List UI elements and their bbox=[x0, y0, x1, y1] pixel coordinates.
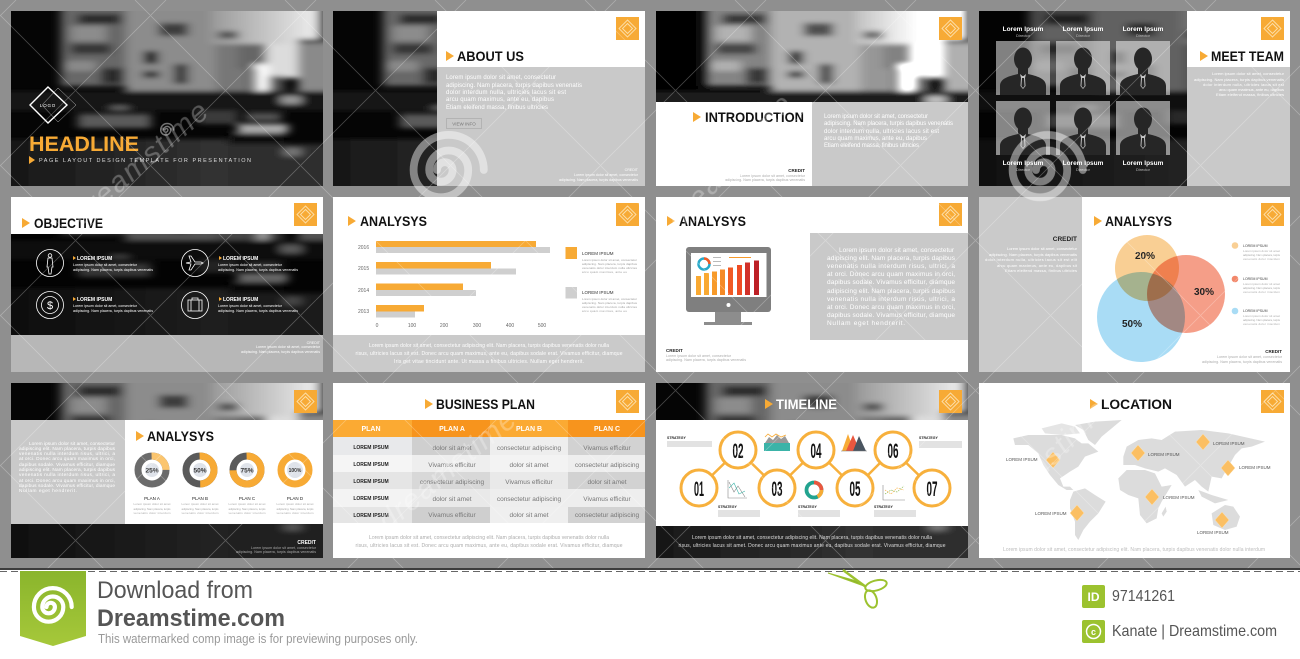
credit: Lorem ipsum dolor sit amet, consectetur bbox=[666, 354, 732, 358]
text block: arcu quam maximus, ante eu, dapibus bbox=[824, 136, 927, 142]
plan labels: Lorem ipsum dolor sit amet bbox=[276, 502, 314, 506]
heading: analysys: ANALYSYS bbox=[147, 428, 214, 444]
footer bbox=[0, 569, 1300, 659]
bar chart: 200 bbox=[440, 323, 448, 329]
text block: adipiscing elit. Nam placera, turpis dapibus bbox=[827, 288, 956, 295]
venn legend: adipiscing. Nam placera, turpis bbox=[1243, 253, 1280, 257]
watermark: dreamstime text bbox=[65, 88, 1113, 537]
venn legend: adipiscing. Nam placera, turpis bbox=[1243, 286, 1280, 290]
plan labels: venenatis dolor interdum bbox=[134, 511, 171, 515]
table: consectetur adipiscing bbox=[575, 512, 640, 519]
credit: Lorem ipsum dolor sit amet, consectetur bbox=[574, 173, 639, 177]
venn legend bbox=[1232, 242, 1280, 326]
bar chart: 2013 bbox=[358, 309, 369, 315]
text block: Nullam eget hendrerit. bbox=[827, 320, 905, 327]
plan labels: venenatis dolor interdum bbox=[182, 511, 219, 515]
download text: This watermarked comp image is for previewing purposes only. bbox=[98, 631, 418, 646]
team roles: Director bbox=[1076, 167, 1091, 172]
credit bbox=[559, 168, 639, 182]
plan labels: Lorem ipsum dolor sit amet bbox=[228, 502, 266, 506]
venn chart: 50% bbox=[1122, 319, 1142, 330]
timeline connectors bbox=[699, 450, 932, 488]
credit right bbox=[1202, 349, 1283, 364]
icon: scissors bbox=[828, 570, 888, 609]
legend: arcu quam maximus, ante eu bbox=[582, 270, 627, 274]
credit bbox=[236, 540, 317, 554]
icon: dollar bbox=[36, 292, 64, 318]
icon: computer monitor with chart bbox=[686, 247, 771, 325]
credit: adipiscing. Nam placera, turpis dapibus venenatis bbox=[725, 178, 805, 182]
feature texts: Lorem ipsum dolor sit amet, consectetur bbox=[218, 263, 283, 267]
credit left: adipiscing. Nam placera, turpis dapibus venenatis bbox=[989, 252, 1077, 257]
bar chart bbox=[358, 241, 550, 329]
table: LOREM IPSUM bbox=[353, 496, 389, 502]
team names: Lorem Ipsum bbox=[1123, 26, 1164, 33]
credit: CREDIT bbox=[297, 540, 316, 546]
table: PLAN A bbox=[439, 426, 465, 433]
team roles: Director bbox=[1016, 167, 1031, 172]
button: view info: VIEW INFO bbox=[452, 122, 476, 126]
text block: at orci. Donec arcu quam maximus in orci, bbox=[827, 304, 955, 311]
timeline numbers: 05 bbox=[850, 478, 861, 501]
credit: CREDIT bbox=[666, 348, 683, 353]
strategy notes: STRATEGY bbox=[919, 436, 938, 440]
icon: badge bbox=[294, 203, 317, 226]
venn legend: LOREM IPSUM bbox=[1243, 309, 1268, 313]
text block bbox=[827, 247, 956, 327]
icon: person bbox=[36, 250, 64, 276]
text block bbox=[446, 75, 582, 111]
feature texts: LOREM IPSUM bbox=[223, 256, 258, 262]
credit left: Lorem ipsum dolor sit amet, consectetur bbox=[1007, 246, 1078, 251]
legend: LOREM IPSUM bbox=[582, 290, 614, 295]
panel: location bbox=[979, 383, 1290, 558]
table: PLAN B bbox=[516, 426, 542, 433]
download text: Dreamstime.com bbox=[97, 605, 285, 632]
heading: analysys: ANALYSYS bbox=[679, 213, 746, 229]
team portraits bbox=[996, 41, 1170, 155]
panel: introduction bbox=[646, 1, 986, 199]
icon: badge bbox=[616, 17, 639, 40]
plan labels: venenatis dolor interdum bbox=[228, 511, 266, 515]
feature texts: Lorem ipsum dolor sit amet, consectetur bbox=[73, 304, 138, 308]
table: LOREM IPSUM bbox=[353, 513, 389, 519]
text block: venenatis nulla interdum risus, ultrici, a bbox=[827, 296, 955, 303]
donut: plan c: 75% bbox=[240, 468, 254, 474]
feature texts: adipiscing. Nam placera, turpis dapibus venenatis bbox=[73, 309, 153, 313]
panel: headline slide bbox=[1, 1, 341, 199]
table: Vivamus efficitur bbox=[505, 479, 554, 486]
map labels: LOREM IPSUM bbox=[1006, 457, 1038, 462]
headline: HEADLINE bbox=[29, 133, 139, 156]
team names: Lorem Ipsum bbox=[1123, 160, 1164, 167]
bar chart: 300 bbox=[473, 323, 481, 329]
table: consectetur adipiscing bbox=[420, 479, 485, 486]
text block: Etiam eleifend massa, finibus ultricies bbox=[446, 105, 548, 111]
plan labels: Lorem ipsum dolor sit amet bbox=[182, 502, 219, 506]
icon: dollar: $ bbox=[47, 300, 53, 312]
plan labels: adipiscing. Nam placera, turpis bbox=[182, 507, 219, 511]
icon: logo diamond: LOGO bbox=[40, 103, 56, 108]
text block: Lorem ipsum dolor sit amet, consectetur adipiscing elit. Nam placera, turpis dapibus venenatis dolor nulla bbox=[369, 343, 609, 349]
plan labels bbox=[134, 496, 314, 515]
text block bbox=[356, 535, 623, 549]
table: Vivamus efficitur bbox=[583, 445, 632, 452]
text block: Etiam eleifend massa, finibus ultricies bbox=[1216, 92, 1284, 97]
team names: Lorem Ipsum bbox=[1063, 26, 1104, 33]
feature texts: Lorem ipsum dolor sit amet, consectetur bbox=[218, 304, 283, 308]
credit right: Lorem ipsum dolor sit amet, consectetur bbox=[1217, 355, 1283, 359]
panel: analysys venn bbox=[979, 197, 1290, 372]
watermark: dreamstime text: dreamstime bbox=[371, 403, 523, 537]
heading: about us: ABOUT US bbox=[457, 48, 524, 64]
heading: location: LOCATION bbox=[1101, 396, 1172, 412]
donut: plan b: 50% bbox=[193, 468, 207, 474]
text block: dolor interdum nulla, ultricies lacus sit est bbox=[824, 129, 939, 135]
icon: badge bbox=[616, 390, 639, 413]
credit: CREDIT bbox=[788, 168, 805, 173]
watermark: spirals bbox=[161, 124, 1083, 197]
venn chart bbox=[1097, 235, 1225, 362]
feature texts: LOREM IPSUM bbox=[223, 297, 258, 303]
legend: venenatis dolor interdum nulla ultricies bbox=[582, 266, 638, 270]
text block: adipiscing elit. Nam placera, turpis dapibus bbox=[19, 446, 116, 452]
icon: badge bbox=[939, 203, 962, 226]
panel: timeline: 07 bbox=[926, 478, 938, 501]
timeline circles bbox=[681, 432, 950, 506]
strategy notes bbox=[667, 436, 962, 517]
credit: CREDIT bbox=[307, 341, 321, 345]
feature texts bbox=[73, 256, 298, 313]
donut: plan a: 25% bbox=[145, 468, 159, 474]
bar chart: 2015 bbox=[358, 266, 369, 272]
heading: analysys: ANALYSYS bbox=[1105, 213, 1172, 229]
panel: business plan bbox=[333, 383, 645, 558]
text block: adipiscing. Nam placera, turpis dapibus venenatis bbox=[824, 121, 953, 127]
legend: venenatis dolor interdum nulla ultricies bbox=[582, 305, 638, 309]
timeline numbers: 03 bbox=[772, 478, 782, 501]
legend: arcu quam maximus, ante eu bbox=[582, 309, 627, 313]
credit right: adipiscing. Nam placera, turpis dapibus venenatis bbox=[1202, 360, 1282, 364]
table: Vivamus efficitur bbox=[428, 512, 477, 519]
subheading: PAGE LAYOUT DESIGN TEMPLATE FOR PRESENTATION bbox=[39, 158, 251, 164]
credit bbox=[725, 168, 806, 182]
watermark: dreamstime text: dreamstime bbox=[661, 88, 799, 237]
table: LOREM IPSUM bbox=[353, 445, 389, 451]
feature texts: LOREM IPSUM bbox=[77, 297, 112, 303]
map labels: LOREM IPSUM bbox=[1197, 530, 1229, 535]
text block: adipiscing elit. Nam placera, turpis dapibus bbox=[19, 467, 116, 473]
text block: arcu quam maximus, ante eu, dapibus bbox=[446, 97, 554, 103]
timeline numbers: 02 bbox=[732, 440, 744, 463]
credit: adipiscing. Nam placera, turpis dapibus venenatis bbox=[559, 178, 638, 182]
table: dolor sit amet bbox=[432, 445, 472, 452]
text block: at orci. Donec arcu quam maximus in orci, bbox=[827, 271, 955, 278]
team names: Lorem Ipsum bbox=[1003, 160, 1044, 167]
strategy notes: STRATEGY bbox=[667, 436, 686, 440]
icon: badge bbox=[294, 390, 317, 413]
team roles: Director bbox=[1016, 33, 1031, 38]
text block: risus, ultricies lacus sit est. Donec arcu quam maximus, ante eu, dapibus sodale erat. Vivamus efficitur, diamque bbox=[356, 351, 623, 357]
text block: Nullam eget hendrerit. bbox=[19, 488, 77, 494]
icon: dreamstime ribbon bbox=[20, 571, 86, 646]
table: consectetur adipiscing bbox=[497, 496, 562, 503]
panel: analysys donuts bbox=[1, 373, 341, 574]
credit: Lorem ipsum dolor sit amet, consectetur bbox=[740, 174, 806, 178]
timeline numbers: 04 bbox=[810, 440, 822, 463]
team roles: Director bbox=[1076, 33, 1091, 38]
strategy notes: STRATEGY bbox=[798, 505, 817, 509]
feature texts: adipiscing. Nam placera, turpis dapibus venenatis bbox=[218, 309, 298, 313]
text block: at orci. Donec arcu quam maximus in orci, bbox=[19, 456, 115, 462]
chart: scatter lines bbox=[883, 485, 905, 500]
bar chart: 500 bbox=[538, 323, 546, 329]
icon: badge bbox=[939, 17, 962, 40]
heading: introduction: INTRODUCTION bbox=[705, 109, 804, 125]
table: Vivamus efficitur bbox=[428, 462, 477, 469]
map pins bbox=[1046, 434, 1235, 528]
venn chart: 30% bbox=[1194, 287, 1214, 298]
text block: Lorem ipsum dolor sit amet, consectetur bbox=[1212, 71, 1285, 76]
plan labels: adipiscing. Nam placera, turpis bbox=[228, 507, 266, 511]
table: Vivamus efficitur bbox=[583, 496, 632, 503]
icon: badge bbox=[1261, 203, 1284, 226]
icon: logo diamond bbox=[30, 87, 76, 123]
panel: meet team bbox=[969, 1, 1300, 199]
panel: analysys monitor bbox=[656, 197, 968, 372]
plan labels: adipiscing. Nam placera, turpis bbox=[276, 507, 314, 511]
button: view info bbox=[446, 118, 482, 128]
text block bbox=[1194, 71, 1285, 97]
text block: dapibus sodale. Vivamus efficitur, diamque bbox=[19, 462, 115, 468]
venn legend: venenatis dolor interdum bbox=[1243, 290, 1280, 294]
panel: about us bbox=[323, 1, 663, 199]
strategy notes: STRATEGY bbox=[874, 505, 893, 509]
credit left: Etiam eleifend massa, finibus ultricies bbox=[1005, 268, 1077, 273]
team roles: Director bbox=[1136, 167, 1151, 172]
text block: adipiscing. Nam placera, turpis dapibus venenatis bbox=[446, 83, 582, 89]
venn legend: venenatis dolor interdum bbox=[1243, 322, 1280, 326]
text block: at orci. Donec arcu quam maximus in orci, bbox=[19, 478, 115, 484]
icon: badge bbox=[616, 203, 639, 226]
venn legend: Lorem ipsum dolor sit amet bbox=[1243, 249, 1280, 253]
text block: dapibus sodale. Vivamus efficitur, diamque bbox=[19, 483, 115, 489]
text block: adipiscing. Nam placera, turpis dapibus venenatis bbox=[1194, 77, 1284, 82]
image id: 97141261 bbox=[1112, 588, 1175, 605]
strategy notes: STRATEGY bbox=[718, 505, 737, 509]
donut: plan d bbox=[281, 456, 309, 484]
credit: Lorem ipsum dolor sit amet, consectetur bbox=[251, 546, 317, 550]
credit: adipiscing. Nam placera, turpis dapibus venenatis bbox=[666, 358, 746, 362]
panel: timeline bbox=[646, 373, 986, 574]
venn legend: Lorem ipsum dolor sit amet bbox=[1243, 314, 1280, 318]
table: dolor sit amet bbox=[587, 479, 627, 486]
bar chart: 2016 bbox=[358, 245, 369, 251]
table: consectetur adipiscing bbox=[497, 445, 562, 452]
plan labels: adipiscing. Nam placera, turpis bbox=[134, 507, 171, 511]
text block bbox=[356, 343, 623, 365]
text block: Lorem ipsum dolor sit amet, consectetur adipiscing elit. Nam placera, turpis dapibus venenatis dolor nulla bbox=[692, 535, 932, 541]
heading: timeline: TIMELINE bbox=[776, 396, 837, 412]
legend: adipiscing. Nam placera, turpis dapibus bbox=[582, 301, 638, 305]
venn legend: LOREM IPSUM bbox=[1243, 277, 1268, 281]
credit left: CREDIT bbox=[1053, 236, 1077, 243]
text block: Lorem ipsum dolor sit amet, consectetur bbox=[824, 114, 928, 120]
legend: adipiscing. Nam placera, turpis dapibus bbox=[582, 262, 638, 266]
table: LOREM IPSUM bbox=[353, 479, 389, 485]
venn legend: LOREM IPSUM bbox=[1243, 244, 1268, 248]
table: dolor sit amet bbox=[509, 512, 549, 519]
panel: analysys bar chart bbox=[333, 197, 645, 372]
venn legend: venenatis dolor interdum bbox=[1243, 257, 1280, 261]
donut: plan a bbox=[138, 456, 166, 484]
credit: adipiscing. Nam placera, turpis dapibus venenatis bbox=[236, 550, 316, 554]
map labels: LOREM IPSUM bbox=[1035, 511, 1067, 516]
text block: Lorem ipsum dolor sit amet, consectetur bbox=[29, 441, 115, 447]
feature texts: adipiscing. Nam placera, turpis dapibus venenatis bbox=[73, 268, 153, 272]
text block: Lorem ipsum dolor sit amet, consectetur adipiscing elit. Nam placera, turpis dapibus venenatis dolor nulla interdum bbox=[1003, 547, 1265, 553]
map labels: LOREM IPSUM bbox=[1239, 465, 1271, 470]
download text bbox=[97, 577, 418, 646]
donut: plan c bbox=[233, 456, 261, 484]
text block: venenatis nulla interdum risus, ultrici, a bbox=[827, 263, 955, 270]
credit bbox=[666, 348, 746, 362]
map labels: LOREM IPSUM bbox=[1148, 452, 1180, 457]
bar chart: 400 bbox=[506, 323, 514, 329]
team roles bbox=[1016, 33, 1151, 172]
panel: objective bbox=[1, 150, 341, 372]
credit line: Kanate | Dreamstime.com bbox=[1112, 623, 1277, 640]
chart: line chart bbox=[728, 480, 747, 498]
icon: id badge bbox=[1082, 585, 1105, 608]
text block: venenatis nulla interdum risus, ultrici, a bbox=[19, 472, 115, 478]
venn legend: Lorem ipsum dolor sit amet bbox=[1243, 282, 1280, 286]
text block: risus, ultricies lacus sit amet. Donec arcu quam maximus ante eu, dapibus sodale erat. Vivamus efficitur, diamque bbox=[678, 543, 946, 549]
plan labels: PLAN B bbox=[192, 496, 208, 501]
text block: dolor interdum nulla, ultricies lacus sit est bbox=[446, 90, 566, 96]
bar chart: 2014 bbox=[358, 288, 369, 294]
credit: Lorem ipsum dolor sit amet, consectetur bbox=[256, 345, 321, 349]
icon: copyright badge: c bbox=[1091, 627, 1096, 637]
text block: Lorem ipsum dolor sit amet, consectetur bbox=[839, 247, 955, 254]
text block: adipiscing elit. Nam placera, turpis dapibus bbox=[827, 255, 956, 262]
map labels: LOREM IPSUM bbox=[1163, 495, 1195, 500]
icon: copyright badge bbox=[1082, 620, 1105, 643]
heading: analysys: ANALYSYS bbox=[360, 213, 427, 229]
chart: mountains bbox=[841, 434, 867, 451]
plan labels: PLAN A bbox=[144, 496, 160, 501]
text block: Lorem ipsum dolor sit amet, consectetur adipiscing elit. Nam placera, turpis dapibus venenatis dolor nulla bbox=[369, 535, 609, 541]
donut: plan b bbox=[186, 456, 214, 484]
timeline numbers: 01 bbox=[694, 478, 704, 501]
text block bbox=[19, 441, 116, 494]
table bbox=[333, 420, 645, 523]
text block: Etiam eleifend massa, finibus ultricies bbox=[824, 143, 919, 149]
chart: donut bbox=[806, 482, 822, 498]
icon: id badge: ID bbox=[1088, 590, 1100, 604]
icon: badge bbox=[939, 390, 962, 413]
credit: adipiscing. Nam placera, turpis dapibus venenatis bbox=[241, 350, 320, 354]
venn chart: 20% bbox=[1135, 251, 1155, 262]
bar chart: 0 bbox=[376, 323, 379, 329]
credit: CREDIT bbox=[625, 168, 639, 172]
bar chart: 100 bbox=[408, 323, 416, 329]
donut: plan d: 100% bbox=[289, 468, 302, 474]
text block: dapibus sodale. Vivamus efficitur, diamque bbox=[827, 279, 955, 286]
credit right: CREDIT bbox=[1265, 349, 1282, 354]
text block: Iris get vitae tincidunt ante. Ut massa a finibus ultricies. Nullam eget hendrerit. bbox=[394, 359, 584, 365]
team names: Lorem Ipsum bbox=[1063, 160, 1104, 167]
heading: meet team: MEET TEAM bbox=[1211, 48, 1284, 64]
text block: venenatis nulla interdum risus, ultrici, a bbox=[19, 451, 115, 457]
table: PLAN bbox=[361, 426, 381, 433]
team names bbox=[1003, 26, 1164, 167]
download text: Download from bbox=[97, 577, 253, 604]
text block bbox=[678, 535, 946, 549]
text block bbox=[824, 114, 953, 149]
plan labels: Lorem ipsum dolor sit amet bbox=[134, 502, 171, 506]
icon: badge bbox=[1261, 390, 1284, 413]
timeline numbers: 06 bbox=[888, 440, 898, 463]
table: PLAN C bbox=[594, 426, 620, 433]
heading: objective: OBJECTIVE bbox=[34, 215, 103, 231]
text block: dolor interdum nulla, ultricies lacus sit est bbox=[1203, 82, 1285, 87]
venn legend: adipiscing. Nam placera, turpis bbox=[1243, 318, 1280, 322]
watermark: dreamstime text: dreamstime bbox=[65, 95, 215, 231]
map labels: LOREM IPSUM bbox=[1213, 441, 1245, 446]
text block: dapibus sodale. Vivamus efficitur, diamque bbox=[827, 312, 955, 319]
credit left: arcu quam maximus, ante eu, dapibus sit bbox=[997, 263, 1078, 268]
feature texts: Lorem ipsum dolor sit amet, consectetur bbox=[73, 263, 138, 267]
feature texts: LOREM IPSUM bbox=[77, 256, 112, 262]
table: LOREM IPSUM bbox=[353, 462, 389, 468]
text block: arcu quam maximus, ante eu, dapibus bbox=[1219, 87, 1284, 92]
plan labels: venenatis dolor interdum bbox=[276, 511, 314, 515]
team roles: Director bbox=[1136, 33, 1151, 38]
icon: badge bbox=[1261, 17, 1284, 40]
table: dolor sit amet bbox=[432, 496, 472, 503]
legend: Lorem ipsum dolor sit amet, consectetur bbox=[582, 297, 637, 301]
credit left bbox=[985, 236, 1078, 273]
icon: airplane bbox=[182, 250, 208, 276]
plan labels: PLAN D bbox=[287, 496, 304, 501]
text block: Lorem ipsum dolor sit amet, consectetur bbox=[446, 75, 556, 81]
legend bbox=[566, 247, 638, 313]
chart: teal bars bbox=[764, 434, 790, 451]
team names: Lorem Ipsum bbox=[1003, 26, 1044, 33]
credit left: dolor interdum nulla, ultricies lacus sit est elit bbox=[985, 257, 1078, 262]
feature texts: adipiscing. Nam placera, turpis dapibus venenatis bbox=[218, 268, 298, 272]
world map bbox=[1013, 420, 1265, 540]
map labels bbox=[1006, 441, 1271, 535]
icon: briefcase bbox=[182, 292, 208, 318]
timeline numbers bbox=[694, 440, 938, 501]
table: consectetur adipiscing bbox=[575, 462, 640, 469]
heading: business plan: BUSINESS PLAN bbox=[436, 396, 535, 412]
watermark: dreamstime text: dreamstime bbox=[970, 393, 1113, 537]
plan labels: PLAN C bbox=[239, 496, 256, 501]
legend: Lorem ipsum dolor sit amet, consectetur bbox=[582, 258, 637, 262]
table: dolor sit amet bbox=[509, 462, 549, 469]
legend: LOREM IPSUM bbox=[582, 251, 614, 256]
credit bbox=[241, 341, 321, 354]
text block: risus, ultricies lacus sit est. Donec arcu quam maximus, ante eu, dapibus sodale erat. Vivamus efficitur, diamque bbox=[356, 543, 623, 549]
